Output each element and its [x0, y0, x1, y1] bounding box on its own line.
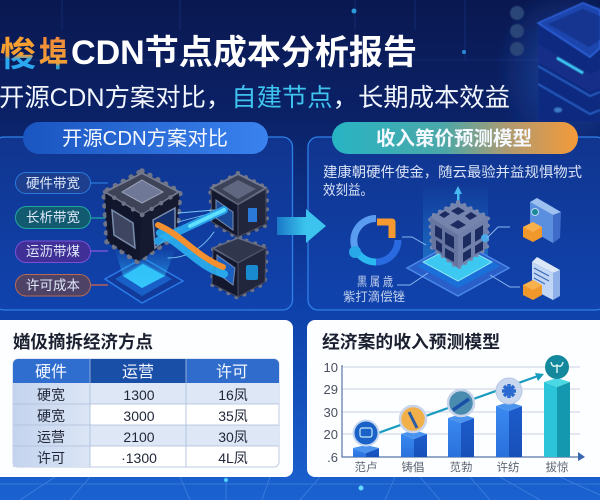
small server cube, lower: [212, 238, 267, 298]
x axis labels: 许纺: [496, 460, 520, 474]
milestone icons: [354, 355, 569, 446]
connector lines: [397, 227, 520, 287]
large server cube: [104, 171, 180, 262]
trend arrow: [378, 373, 544, 433]
x axis labels: 范卢: [354, 460, 378, 474]
bars: [353, 378, 570, 457]
panel: revenue forecast chart card: [307, 320, 600, 477]
gridlines and axis: [342, 365, 585, 461]
panel heading pill: [332, 122, 578, 154]
x axis labels: 拔惊: [546, 460, 568, 474]
table rows: 硬宽: [37, 408, 65, 424]
card heading: 媨伋摘拆经济方点: [13, 332, 153, 352]
diagram caption: [343, 275, 405, 304]
panel: revenue forecast model: [308, 122, 600, 310]
x axis labels: [354, 460, 568, 474]
diagram caption: 黒 属 歳: [357, 275, 393, 289]
table rows: 2100: [123, 429, 155, 445]
x axis labels: 铸倡: [402, 460, 424, 474]
table rows: [37, 387, 248, 466]
panel heading pill: 收入策价预测模型: [376, 127, 532, 150]
small server cube, upper: [210, 173, 267, 238]
status dots: [510, 6, 524, 56]
bottom perspective grid: [0, 477, 600, 500]
cost label pills: 许可成本: [26, 278, 80, 293]
cost label pills: 运沥带煤: [26, 244, 80, 259]
panel heading pill: 开源CDN方案对比: [62, 127, 228, 150]
description text: 效刻益。: [323, 182, 373, 198]
heading: CDN节点成本分析报告: [71, 34, 417, 72]
light column: [423, 187, 488, 262]
data table: [13, 359, 279, 467]
title: [0, 34, 417, 74]
table rows: 许可: [37, 450, 65, 466]
logo glyphs: [0, 36, 68, 74]
table header: 许可: [216, 363, 248, 381]
table rows: 30凤: [218, 429, 248, 445]
subtitle: 开源CDN方案对比，自建节点，长期成本效益: [0, 84, 510, 112]
logo glyphs: 悛: [0, 36, 36, 74]
cost label pills: 硬件带宽: [26, 175, 80, 191]
table rows: 4L凤: [218, 450, 248, 466]
decorative server tower, top right: [495, 0, 600, 155]
y axis labels: [324, 360, 338, 465]
table header: 运营: [122, 363, 154, 381]
table header: [35, 363, 248, 381]
y axis labels: 29: [324, 382, 338, 397]
panel: economics table card: [0, 320, 293, 477]
bar chart: [324, 355, 585, 474]
table rows: 16凤: [218, 387, 248, 403]
table rows: 硬宽: [37, 387, 65, 403]
server document, lower: [523, 257, 560, 300]
data beams: [158, 210, 224, 274]
y axis labels: 30: [324, 405, 338, 420]
description text: 建康朝硬件使金，随云最验并益规惧物式: [323, 164, 582, 180]
table rows: 3000: [123, 408, 155, 424]
diagram caption: 紫打滴偿锉: [343, 289, 405, 304]
table header: 硬件: [35, 363, 67, 381]
logo glyphs: 埠: [39, 36, 68, 74]
platform: [407, 240, 509, 296]
y axis labels: 20: [324, 427, 338, 442]
antenna: [454, 186, 462, 208]
y axis labels: 10: [324, 360, 338, 375]
server document, upper: [523, 198, 561, 243]
grid cube: [430, 202, 489, 268]
panel heading pill: [23, 122, 268, 154]
table rows: 运营: [37, 429, 65, 445]
card heading: 经济案的收入预测模型: [322, 332, 500, 352]
arrow between panels: [277, 209, 326, 243]
x axis labels: 苋勃: [450, 461, 472, 474]
panel: open source CDN comparison: [0, 122, 292, 310]
table rows: 35凤: [218, 408, 248, 424]
cycle ring icon: [349, 218, 398, 262]
glowing pedestal: [105, 250, 183, 303]
y axis labels: .6: [327, 450, 338, 465]
table rows: ·1300: [121, 450, 157, 466]
table rows: 1300: [123, 387, 155, 403]
cost label pills: [16, 172, 108, 296]
description text: [323, 164, 582, 198]
cost label pills: 长析带宽: [26, 209, 80, 225]
